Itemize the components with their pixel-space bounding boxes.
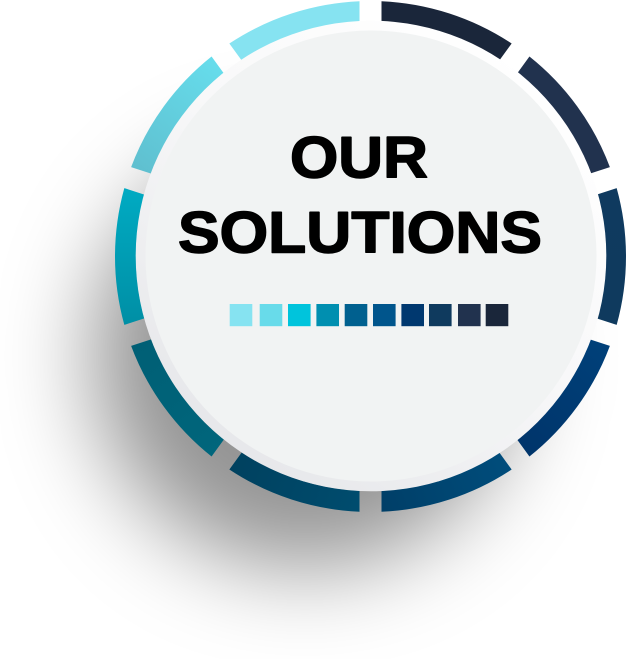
ring segment 7 bbox=[131, 339, 224, 457]
swatch 1 bbox=[230, 304, 252, 326]
ring segment 5 bbox=[382, 452, 512, 512]
swatch 5 bbox=[345, 304, 367, 326]
swatch 9 bbox=[458, 304, 481, 326]
swatch 3 bbox=[288, 304, 311, 326]
inner disc bbox=[146, 30, 596, 482]
swatch 7 bbox=[401, 304, 424, 326]
swatch 4 bbox=[316, 304, 339, 326]
disc rim bbox=[136, 21, 606, 491]
colour swatch row bbox=[230, 304, 508, 326]
ring segment 1 bbox=[382, 1, 512, 61]
title line 1: OUR bbox=[290, 126, 428, 190]
ring segment 8 bbox=[115, 188, 144, 325]
ring segment 9 bbox=[131, 56, 224, 174]
segmented outer ring bbox=[115, 1, 626, 512]
swatch 2 bbox=[260, 304, 282, 326]
ring segment 2 bbox=[517, 56, 610, 174]
title bbox=[178, 126, 542, 266]
swatch 6 bbox=[373, 304, 396, 326]
ring segment 4 bbox=[517, 339, 610, 457]
ring segment 6 bbox=[229, 452, 360, 512]
title line 2: SOLUTIONS bbox=[178, 200, 542, 266]
drop shadow bbox=[93, 144, 517, 568]
ring segment 3 bbox=[597, 188, 626, 325]
swatch 8 bbox=[429, 304, 452, 326]
ring segment 10 bbox=[229, 1, 360, 61]
swatch 10 bbox=[486, 304, 508, 326]
